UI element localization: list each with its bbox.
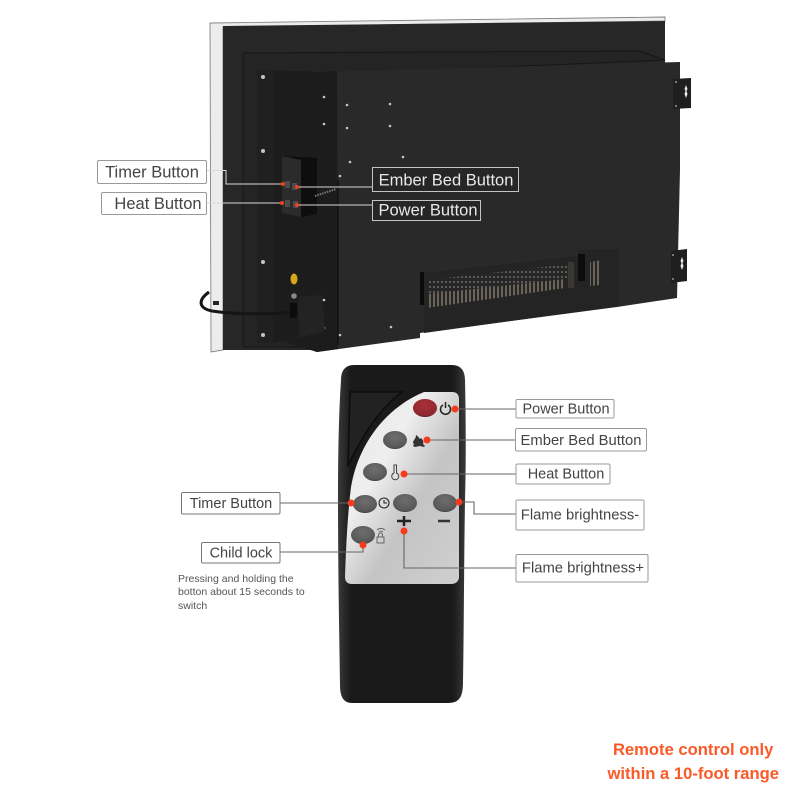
callout lines on fireplace	[207, 170, 372, 205]
icon: wireless lock	[377, 528, 385, 543]
silver front frame	[210, 17, 665, 352]
heater vent	[420, 249, 619, 333]
icon: power	[440, 402, 450, 414]
button: minus	[433, 494, 457, 512]
power cord	[201, 292, 325, 338]
label: Timer Button (top)	[98, 160, 206, 184]
label: Heat Button (top)	[102, 192, 206, 214]
label: Flame brightness+	[516, 554, 648, 582]
wall bracket: upper	[673, 78, 691, 109]
label: Power Button: Power Button	[522, 402, 610, 418]
button: lock	[351, 526, 375, 544]
label: Flame brightness-: Flame brightness-	[521, 508, 639, 524]
label: Child lock	[202, 542, 280, 563]
button: power	[413, 399, 437, 417]
button: plus	[393, 494, 417, 512]
remote body	[338, 365, 466, 703]
fireplace back view	[201, 17, 691, 352]
screws	[261, 75, 404, 337]
icon: clock	[379, 498, 389, 508]
icon: flame	[413, 435, 425, 447]
remote control	[338, 365, 466, 703]
left shoulder of housing	[273, 70, 338, 352]
range note: within a 10-foot range	[607, 764, 779, 783]
label: Ember Bed Button	[516, 428, 646, 451]
red dots on fireplace	[280, 182, 299, 207]
label: Flame brightness-	[516, 500, 644, 530]
label: Heat Button (top): Heat Button	[114, 195, 202, 213]
range note: Remote control only	[613, 740, 774, 759]
black back panel	[223, 21, 665, 350]
yellow warning sticker	[290, 274, 298, 284]
label: Child lock: Child lock	[210, 546, 273, 562]
button: timer	[353, 495, 377, 513]
label: Timer Button: Timer Button	[190, 496, 272, 512]
silver button panel	[345, 392, 459, 584]
control module	[282, 156, 336, 217]
wall bracket: lower	[671, 249, 687, 283]
label: Power Button (top): Power Button	[378, 202, 478, 220]
label: Ember Bed Button: Ember Bed Button	[521, 433, 641, 449]
label: Timer Button	[182, 492, 280, 514]
label: Flame brightness+: Flame brightness+	[522, 560, 644, 576]
button: heat	[363, 463, 387, 481]
label: Heat Button	[516, 464, 610, 484]
label: Heat Button: Heat Button	[528, 466, 604, 482]
label: Ember Bed Button (top): Ember Bed Button	[379, 172, 513, 190]
raised inner panel	[243, 51, 665, 347]
red dots on remote	[348, 406, 462, 548]
label: Ember Bed Button (top)	[372, 168, 518, 192]
icon: plus	[397, 516, 411, 526]
main rear housing	[317, 62, 680, 352]
button: ember	[383, 431, 407, 449]
icon: minus	[438, 520, 450, 522]
label: Timer Button (top): Timer Button	[105, 164, 199, 182]
callout lines on remote	[280, 409, 516, 568]
icon: thermometer	[392, 465, 399, 480]
side flange	[257, 70, 317, 352]
recessed window	[348, 392, 402, 466]
child lock note: Pressing and holding the	[178, 573, 294, 585]
child lock note: switch	[178, 600, 207, 612]
child lock note: botton about 15 seconds to	[178, 586, 305, 598]
